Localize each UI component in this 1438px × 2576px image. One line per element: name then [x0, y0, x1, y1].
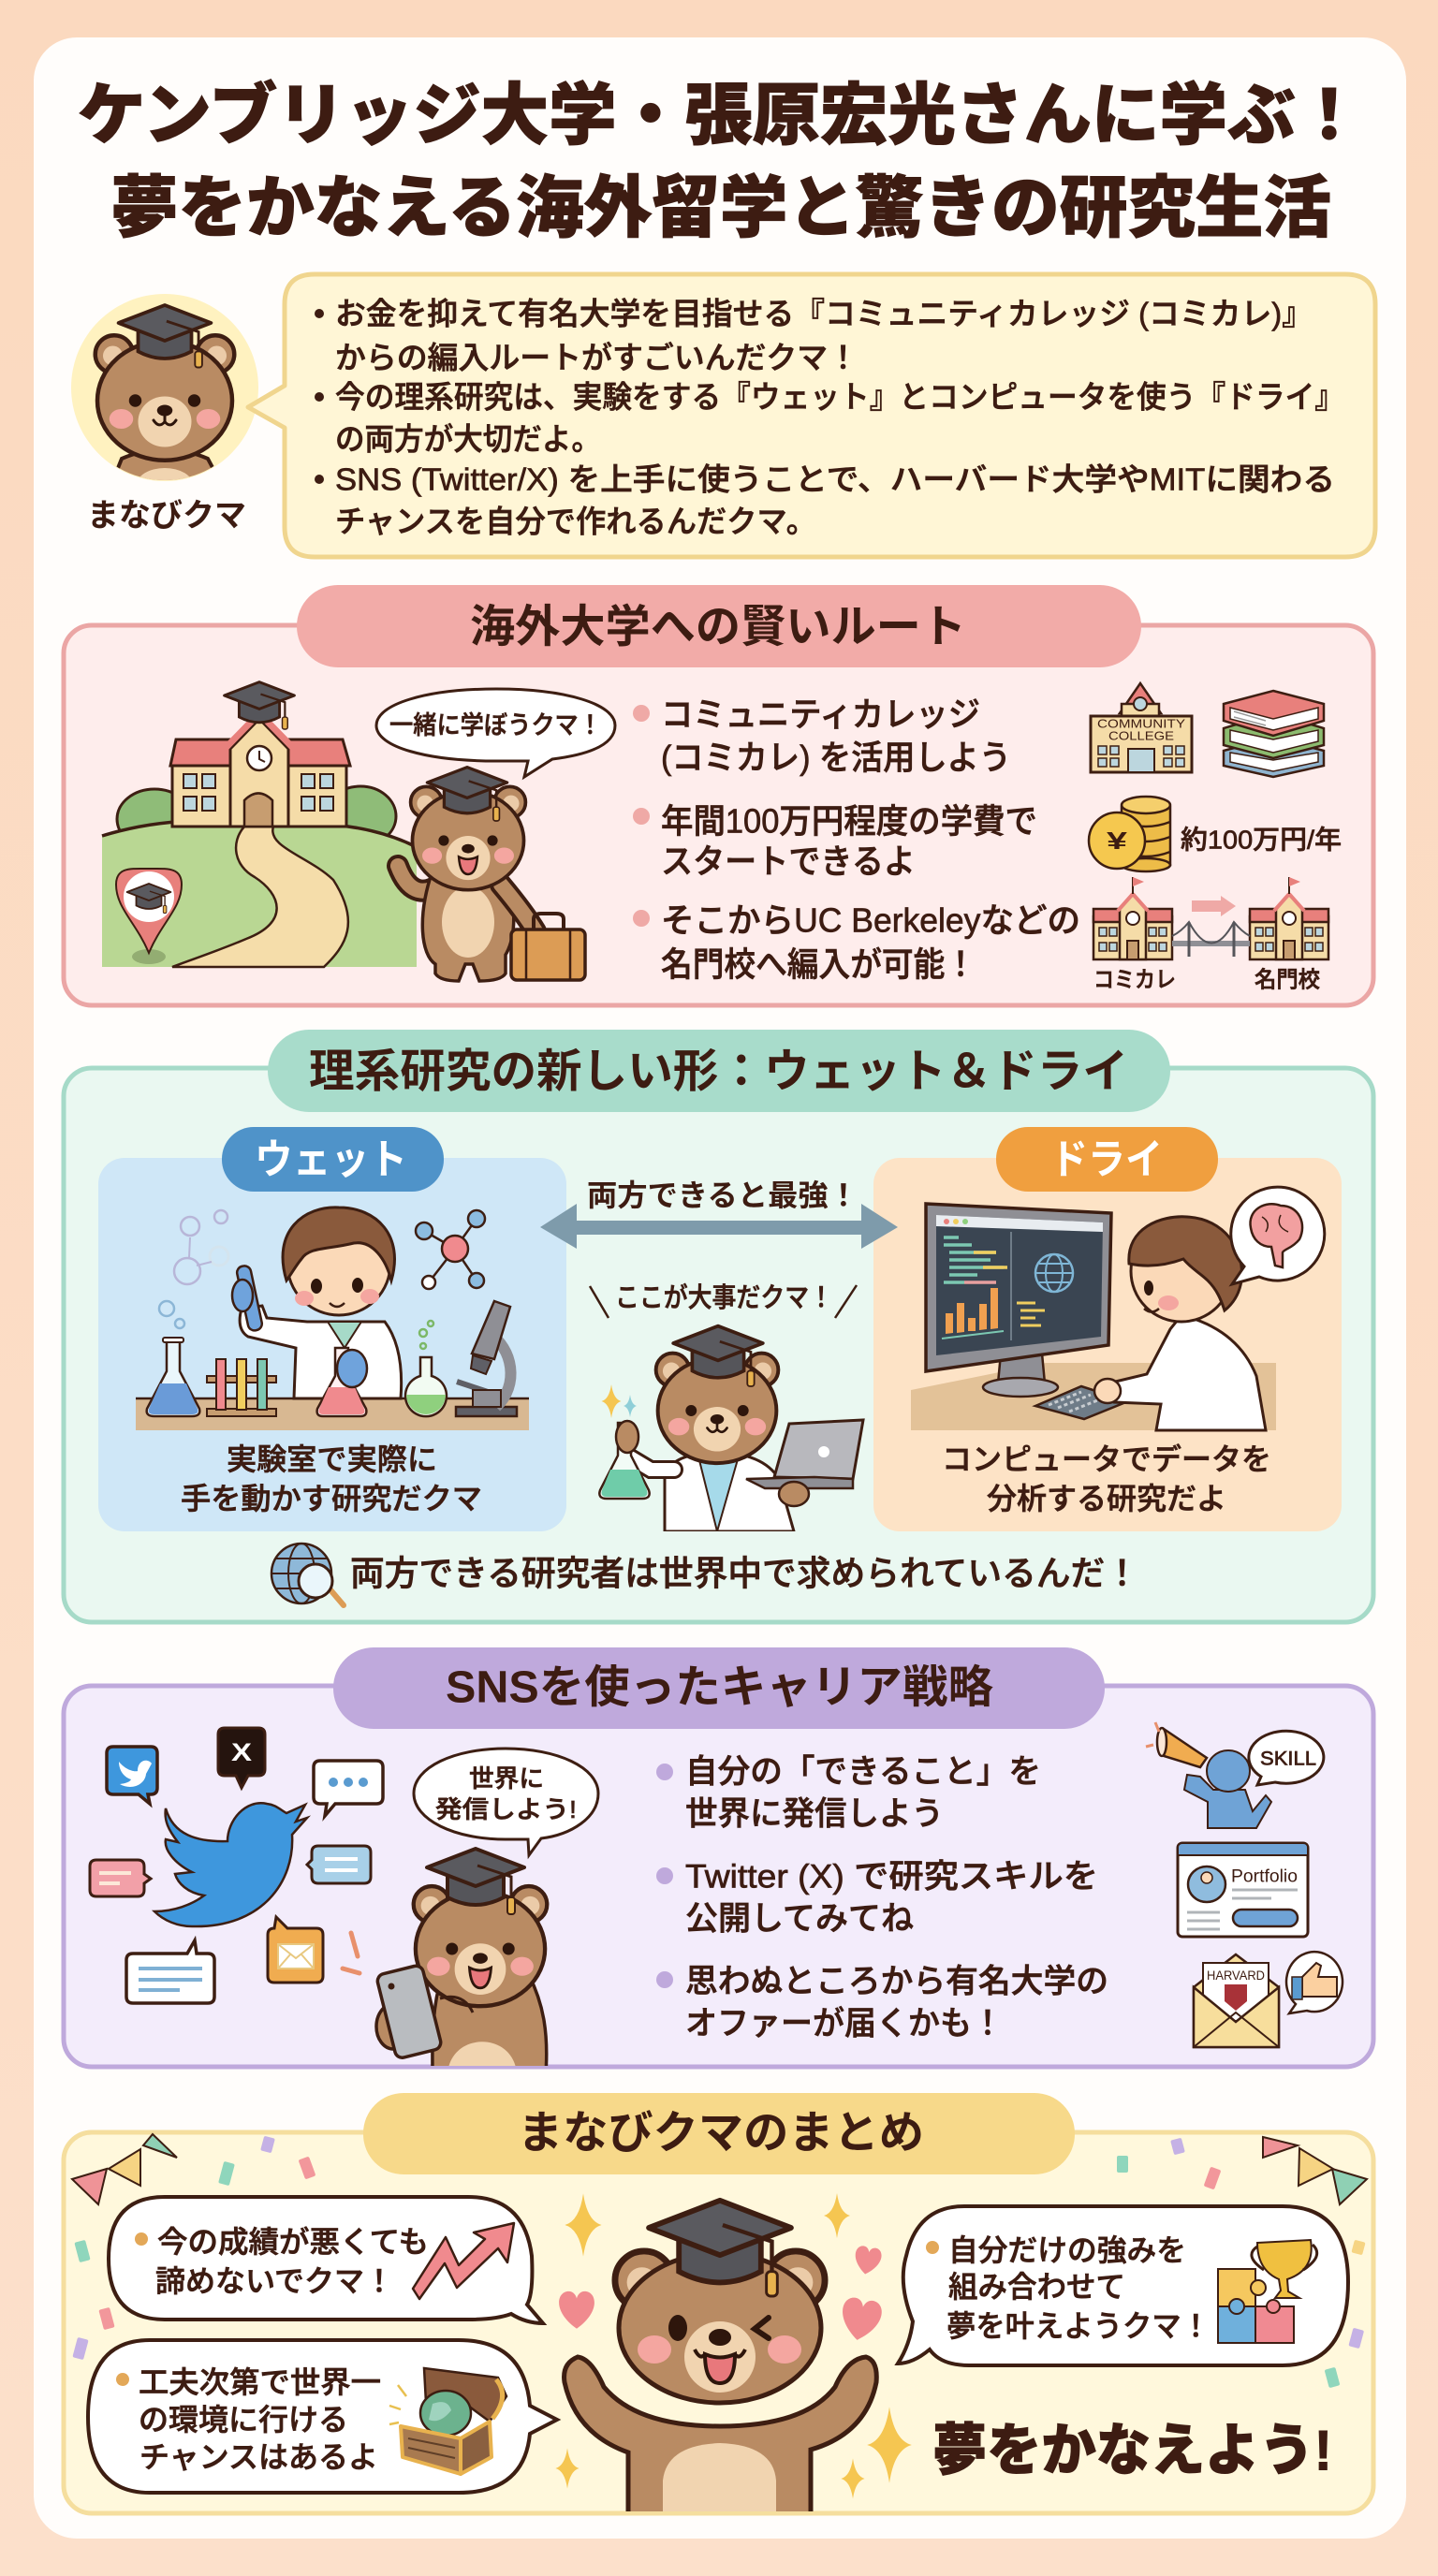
illustration: campus on a hill: [102, 682, 417, 967]
icon: person with megaphone: [1146, 1722, 1271, 1828]
character: bear scientist: [599, 1326, 863, 1531]
bullet list: SNS: 自分の「できること」を: [685, 1754, 1041, 1790]
bullet list: route: コミュニティカレッジ: [661, 695, 980, 734]
speech bubble: chances exist: の環境に行ける: [139, 2403, 348, 2437]
heading: route: [297, 585, 1141, 667]
decoration: sparkles and hearts: [555, 2193, 912, 2499]
callout: key points summary: [248, 274, 1375, 557]
callout: key points summary: 今の理系研究は、実験をする『ウェット』とコンピュータを使う『ドライ』: [335, 380, 1344, 414]
callout: key points summary: からの編入ルートがすごいんだクマ！: [335, 341, 858, 374]
icon: trophy: [1252, 2240, 1317, 2298]
panel: summary: [64, 2093, 1373, 2518]
illustration: researcher at computer: [911, 1204, 1276, 1430]
speech bubble: chances exist: チャンスはあるよ: [139, 2440, 378, 2474]
text: researchers wanted worldwide: 両方できる研究者は世界中で求められているんだ！: [350, 1554, 1139, 1593]
dry caption: [942, 1442, 1271, 1515]
bullet list: route: 名門校へ編入が可能！: [661, 945, 976, 983]
icon: community college building: COMMUNITY: [1097, 717, 1185, 730]
speech bubble: combine strengths: 夢を叶えようクマ！: [946, 2309, 1211, 2343]
title: [78, 79, 1363, 246]
wet label: [222, 1127, 444, 1192]
sub-panel: wet: [98, 1127, 566, 1531]
icon: treasure chest with globe: [389, 2368, 506, 2474]
panel: smart route to overseas universities: [64, 585, 1373, 1005]
icon: stack of books: [1224, 691, 1324, 777]
diagram: transfer from community college to top school: コミカレ: [1093, 968, 1176, 992]
callout: key points summary: の両方が大切だよ。: [335, 421, 601, 457]
heading: route: 海外大学への賢いルート: [470, 603, 966, 651]
text: let's make dreams come true: 夢をかなえよう!: [932, 2419, 1332, 2482]
icons: floating social bubbles: [90, 1728, 383, 2003]
character: bear with smartphone: [343, 1849, 547, 2073]
bullet list: SNS: 公開してみてね: [685, 1900, 914, 1938]
speech bubble: study together: 一緒に学ぼうクマ！: [389, 711, 602, 739]
heading: research: 理系研究の新しい形：ウェット＆ドライ: [309, 1046, 1128, 1097]
wet caption: 実験室で実際に: [227, 1442, 437, 1476]
speech bubble: skill: SKILL: [1260, 1749, 1316, 1769]
dry caption: 分析する研究だよ: [987, 1482, 1226, 1515]
speech bubble: do not give up: 今の成績が悪くても: [157, 2225, 429, 2259]
heading: research: [268, 1030, 1170, 1112]
avatar label: まなびクマ: [87, 498, 246, 534]
bullet list: SNS: 思わぬところから有名大学の: [685, 1964, 1108, 1999]
decoration: bunting and confetti: [72, 2134, 1367, 2388]
speech bubble: chances exist: 工夫次第で世界一: [139, 2365, 381, 2399]
label: both is strongest: 両方できると最強！: [587, 1178, 858, 1212]
bullet list: route: スタートできるよ: [661, 842, 916, 880]
speech bubble: share with the world: 世界に: [469, 1764, 544, 1793]
bullet list: SNS: [656, 1754, 1108, 2042]
icon: まなびクマ avatar: [71, 294, 258, 502]
icon: Harvard offer letter: [1194, 1954, 1279, 2047]
icon: community college building: COLLEGE: [1108, 728, 1174, 743]
icons: floating social bubbles: X: [231, 1738, 252, 1766]
callout: this is important: ここが大事だクマ！: [615, 1282, 833, 1313]
bullet list: SNS: オファーが届くかも！: [685, 2005, 1004, 2042]
label: annual cost: 約100万円/年: [1181, 826, 1342, 854]
speech bubble: chances exist: [88, 2340, 557, 2493]
title: ケンブリッジ大学・張原宏光さんに学ぶ！: [78, 79, 1363, 154]
bullet list: SNS: Twitter (X) で研究スキルを: [685, 1859, 1098, 1895]
thought bubble: brain: [1231, 1187, 1325, 1284]
heading: summary: まなびクマのまとめ: [518, 2108, 924, 2159]
bullet list: route: [633, 695, 1080, 983]
dry label: ドライ: [1050, 1136, 1163, 1183]
sub-panel: dry: [873, 1127, 1342, 1531]
speech bubble: combine strengths: 組み合わせて: [948, 2270, 1125, 2304]
speech bubble: combine strengths: [898, 2206, 1348, 2365]
wet caption: [181, 1442, 482, 1515]
bullet list: SNS: 世界に発信しよう: [685, 1795, 944, 1833]
heading: SNS: SNSを使ったキャリア戦略: [446, 1662, 993, 1713]
bullet list: route: 年間100万円程度の学費で: [661, 801, 1037, 841]
speech bubble: do not give up: 諦めないでクマ！: [155, 2264, 394, 2298]
illustration: scientist at lab bench: [136, 1208, 529, 1430]
panel: SNS career strategy: [64, 1647, 1373, 2073]
wet caption: 手を動かす研究だクマ: [181, 1482, 482, 1515]
bullet list: route: そこからUC Berkeleyなどの: [661, 900, 1080, 940]
icon: portfolio window: [1178, 1843, 1308, 1937]
dry caption: コンピュータでデータを: [942, 1442, 1271, 1476]
diagram: transfer from community college to top school: 名門校: [1255, 968, 1320, 992]
character: bear with suitcase: [398, 768, 585, 981]
heading: SNS: [333, 1647, 1105, 1729]
title: 夢をかなえる海外留学と驚きの研究生活: [110, 171, 1331, 246]
icon: location pin: [116, 869, 182, 964]
dry label: [996, 1127, 1218, 1192]
heading: summary: [363, 2093, 1075, 2174]
icon: globe with magnifier: [271, 1544, 344, 1605]
bullet list: route: (コミカレ) を活用しよう: [661, 738, 1011, 777]
diagram: transfer from community college to top school: [1093, 877, 1328, 992]
speech bubble: do not give up: [109, 2197, 543, 2323]
wet label: ウェット: [255, 1136, 407, 1183]
icon: yen coins: [1089, 797, 1170, 871]
icon: community college building: [1091, 683, 1192, 772]
speech bubble: study together: [376, 689, 615, 777]
speech bubble: share with the world: [414, 1749, 598, 1855]
icon: Harvard offer letter: HARVARD: [1207, 1968, 1265, 1983]
callout: key points summary: チャンスを自分で作れるんだクマ。: [335, 504, 816, 539]
callout: key points summary: お金を抑えて有名大学を目指せる『コミュニティカレッジ (コミカレ)』: [335, 296, 1313, 331]
icon: portfolio window: Portfolio: [1231, 1866, 1298, 1887]
speech bubble: skill: [1249, 1731, 1324, 1785]
arrow: both ways: [540, 1204, 898, 1249]
callout: key points summary: SNS (Twitter/X) を上手に使うことで、ハーバード大学やMITに関わる: [335, 462, 1335, 496]
speech bubble: combine strengths: 自分だけの強みを: [948, 2233, 1186, 2267]
icon: rising arrow: [413, 2223, 514, 2299]
icon: yen coins: ¥: [1107, 827, 1128, 855]
speech bubble: share with the world: 発信しよう!: [435, 1795, 577, 1823]
icon: blue bird: [154, 1803, 307, 1926]
icon: jigsaw puzzle: [1218, 2269, 1294, 2343]
panel: wet and dry research: [64, 1030, 1373, 1622]
character: cheering bear: [565, 2201, 876, 2518]
speech bubble: thumbs up: [1286, 1952, 1343, 2013]
